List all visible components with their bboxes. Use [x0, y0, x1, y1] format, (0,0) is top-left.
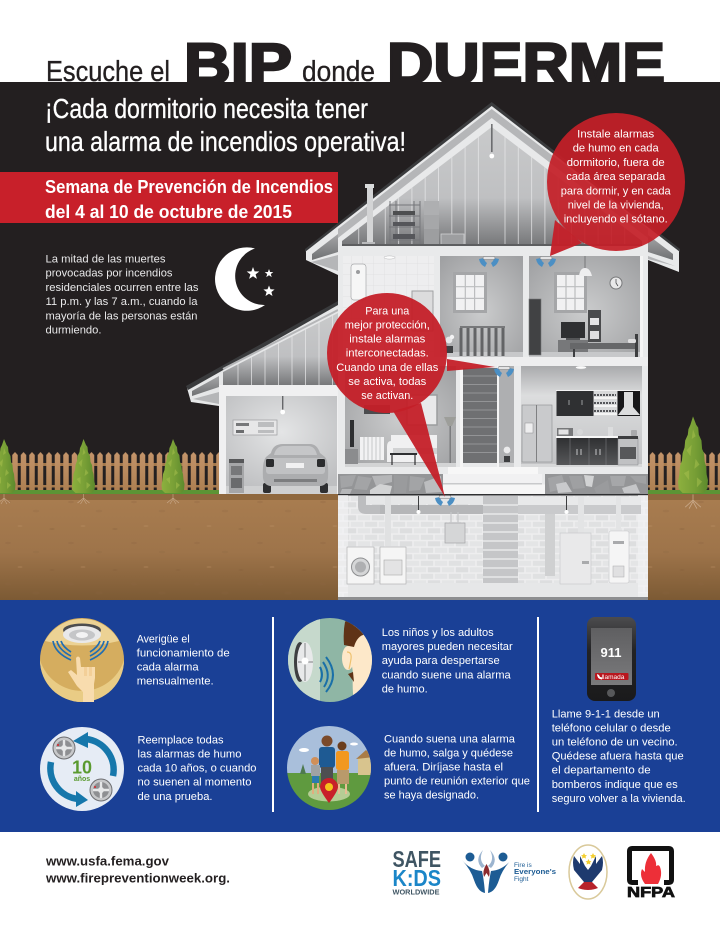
callout: interconnected alarms: Para una [365, 305, 410, 317]
text: get out and stay out: de humo, salga y quédese [384, 747, 513, 759]
footer websites [45, 855, 230, 886]
divider left [272, 617, 274, 812]
title: Escuche el BIP donde DUERME: DUERME [387, 32, 665, 97]
text: call 911 [552, 708, 686, 805]
divider right [537, 617, 539, 812]
smoke alarm landing [494, 366, 514, 377]
icon: ear and alarm [288, 618, 372, 702]
water heater basement [609, 496, 629, 583]
water heater [351, 264, 366, 300]
bedroom middle [440, 256, 523, 357]
landing [499, 366, 514, 467]
red banner: Semana de Prevención de Incendios [45, 176, 333, 197]
text: get out and stay out: punto de reunión exterior que [384, 776, 530, 788]
stone foundation right [545, 474, 648, 494]
base cabinets [556, 436, 618, 465]
statistic text: mayoría de las personas están [46, 310, 198, 322]
smoke alarm basement [435, 496, 455, 506]
tool cart [229, 459, 244, 493]
flowers [446, 335, 454, 353]
text: test monthly [137, 633, 230, 688]
statistic text: provocadas por incendios [46, 268, 173, 280]
living room [345, 366, 456, 467]
icon: replace every 10 years: 10 [72, 758, 92, 778]
main roof [305, 102, 680, 275]
icon: press test button [40, 618, 124, 702]
text: help waking up: mayores pueden necesitar [382, 641, 513, 653]
callout: every bedroom: incluyendo el sótano. [564, 213, 668, 225]
window [554, 272, 587, 313]
kitchen [521, 366, 642, 467]
tree 4 right [678, 416, 708, 509]
floor lamp [444, 417, 456, 463]
basement [338, 494, 648, 600]
callout: interconnected alarms: instale alarmas [349, 334, 426, 346]
text: test monthly: cada alarma [137, 661, 199, 673]
tree 2 [72, 439, 95, 504]
tv stand [345, 420, 358, 464]
text: replace alarms: las alarmas de humo [138, 748, 242, 760]
footer websites: www.firepreventionweek.org. [45, 872, 230, 886]
icon: moon and stars [215, 247, 275, 311]
night sky background [0, 82, 720, 500]
callout: interconnected alarms: Cuando una de ellas [336, 362, 439, 374]
footer websites: www.usfa.fema.gov [45, 855, 169, 869]
logo: Safe Kids Worldwide [392, 846, 441, 896]
sofa [387, 435, 437, 462]
text: test monthly: funcionamiento de [137, 647, 230, 659]
icon: phone calling 911: 911 [601, 645, 621, 660]
title: Escuche el BIP donde DUERME: Escuche el [46, 56, 170, 88]
smoke alarm bedroom middle [479, 256, 499, 267]
callout: interconnected alarms [327, 293, 495, 497]
top white header background [0, 0, 720, 82]
logo: Safe Kids Worldwide: WORLDWIDE [392, 890, 440, 896]
garage roof [186, 301, 338, 406]
text: replace alarms: de una prueba. [138, 791, 212, 803]
ceiling lamp [579, 256, 592, 276]
title: Escuche el BIP donde DUERME: donde [302, 56, 375, 88]
bath light [384, 256, 395, 259]
range hood [618, 392, 640, 415]
plant [504, 447, 510, 462]
icon: family at meeting place [287, 726, 374, 810]
footer white background [0, 832, 720, 932]
fridge [522, 405, 552, 462]
icon: replace every 10 years [40, 727, 124, 811]
radiator [360, 437, 384, 460]
right fence [648, 452, 720, 490]
text: replace alarms [138, 734, 256, 803]
logo: Safe Kids Worldwide: SAFE [392, 846, 441, 872]
living room window [407, 395, 437, 425]
logo: Fire is Everyone's Fight: Fire is [514, 862, 532, 869]
house walls [338, 246, 648, 494]
text: call 911: el departamento de [552, 765, 651, 777]
text: test monthly: Averigüe el [137, 633, 190, 645]
microwave [557, 428, 573, 436]
text: help waking up: cuando suene una alarma [382, 669, 511, 681]
attic shelves and boxes [389, 201, 464, 245]
subtitle [45, 93, 406, 157]
text: get out and stay out: Cuando suena una alarma [384, 733, 516, 745]
text: test monthly: mensualmente. [137, 676, 214, 688]
red banner: del 4 al 10 de octubre de 2015 [45, 201, 292, 222]
stair railing [460, 326, 505, 356]
bookcase [588, 310, 601, 342]
text: help waking up: de humo. [382, 683, 428, 695]
vent pipe [362, 184, 375, 245]
text: call 911: bomberos indique que es [552, 779, 678, 791]
callout: every bedroom: de humo en cada [573, 143, 659, 155]
text: replace alarms: no suenen al momento [138, 777, 252, 789]
washer [347, 547, 374, 584]
left fence [0, 452, 219, 490]
ducts [358, 496, 641, 576]
furnace [560, 496, 591, 584]
logo: Fire is Everyone's Fight: Everyone's [514, 869, 556, 876]
statistic text: 11 p.m. y las 7 a.m., cuando la [46, 296, 198, 308]
statistic text: La mitad de las muertes [46, 254, 166, 266]
picture [364, 405, 390, 414]
car [263, 444, 328, 493]
upper cabinets [556, 390, 640, 416]
stone foundation left [338, 474, 443, 494]
bedroom right [529, 256, 643, 357]
title: Escuche el BIP donde DUERME: BIP [184, 32, 292, 97]
logo: Safe Kids Worldwide: K:DS [392, 865, 441, 891]
logo: USFA seal [569, 845, 607, 899]
callout: every bedroom: nivel de la vivienda, [568, 199, 664, 211]
stove [618, 430, 638, 465]
bath door [412, 291, 433, 331]
text: help waking up [382, 627, 513, 695]
door [529, 299, 541, 355]
clock [610, 277, 622, 289]
grass strips [0, 490, 720, 494]
title: Escuche el BIP donde DUERME [46, 32, 665, 97]
bathroom [343, 256, 434, 357]
blue tips panel [0, 600, 720, 832]
callout: interconnected alarms: interconectadas. [346, 348, 429, 360]
text: get out and stay out: afuera. Diríjase hasta el [384, 761, 503, 773]
logo: NFPA [627, 848, 676, 901]
garage light [280, 396, 285, 414]
callout: interconnected alarms: mejor protección, [345, 319, 430, 331]
ground soil [0, 494, 720, 600]
countertop items [577, 427, 613, 436]
bed [570, 334, 638, 357]
subtitle: ¡Cada dormitorio necesita tener [45, 93, 368, 124]
red banner [0, 172, 338, 223]
logo: Fire is Everyone's Fight: Fight [514, 876, 529, 883]
electrical panel [445, 512, 465, 543]
basement stairs [483, 496, 518, 583]
kitchen ceiling light [576, 366, 586, 369]
house illustration [186, 102, 680, 600]
text: help waking up: ayuda para despertarse [382, 655, 500, 667]
garage [219, 385, 338, 494]
text: call 911: teléfono celular o desde [552, 722, 671, 734]
text: replace alarms: cada 10 años, o cuando [138, 763, 256, 775]
callout: every bedroom: cada área separada [566, 171, 666, 183]
statistic text: residenciales ocurren entre las [46, 282, 199, 294]
icon: phone calling 911: llamada [602, 674, 625, 681]
icon: replace every 10 years: años [74, 776, 90, 783]
text: get out and stay out [384, 733, 530, 802]
text: help waking up: Los niños y los adultos [382, 627, 494, 639]
logo: Fire is Everyone's Fight [462, 850, 556, 893]
smoke alarm bedroom right [536, 256, 556, 267]
tree 3 [162, 439, 184, 504]
callout: every bedroom: para dormir, y en cada [561, 185, 671, 197]
dryer [380, 547, 406, 584]
icon: phone calling 911 [587, 617, 636, 701]
dresser [558, 340, 588, 352]
subtitle: una alarma de incendios operativa! [45, 126, 406, 157]
front steps [443, 467, 545, 494]
text: call 911: seguro volver a la vivienda. [552, 793, 686, 805]
basement lights [416, 496, 568, 514]
statistic text [46, 254, 199, 336]
text: get out and stay out: se haya designado. [384, 790, 479, 802]
callout: every bedroom: Instale alarmas [577, 129, 655, 141]
coffee table [390, 453, 417, 465]
text: call 911: un teléfono de un vecino. [552, 737, 678, 749]
text: call 911: Llame 9-1-1 desde un [552, 708, 660, 720]
callout: interconnected alarms: se activa, todas [348, 376, 427, 388]
tree 1 [0, 439, 16, 504]
attic light [489, 124, 494, 158]
attic [342, 120, 642, 246]
tv [561, 322, 585, 340]
statistic text: durmiendo. [46, 324, 102, 336]
window [453, 272, 487, 313]
staircase main [460, 366, 499, 468]
garage shelf [233, 420, 277, 435]
callout: every bedroom: dormitorio, fuera de [567, 157, 665, 169]
logo: NFPA: NFPA [627, 885, 676, 901]
callout: interconnected alarms: se activan. [361, 390, 413, 402]
text: call 911: Quédese afuera hasta que [552, 751, 684, 763]
floor band [338, 357, 648, 366]
text: replace alarms: Reemplace todas [138, 734, 224, 746]
callout: every bedroom [547, 113, 685, 256]
